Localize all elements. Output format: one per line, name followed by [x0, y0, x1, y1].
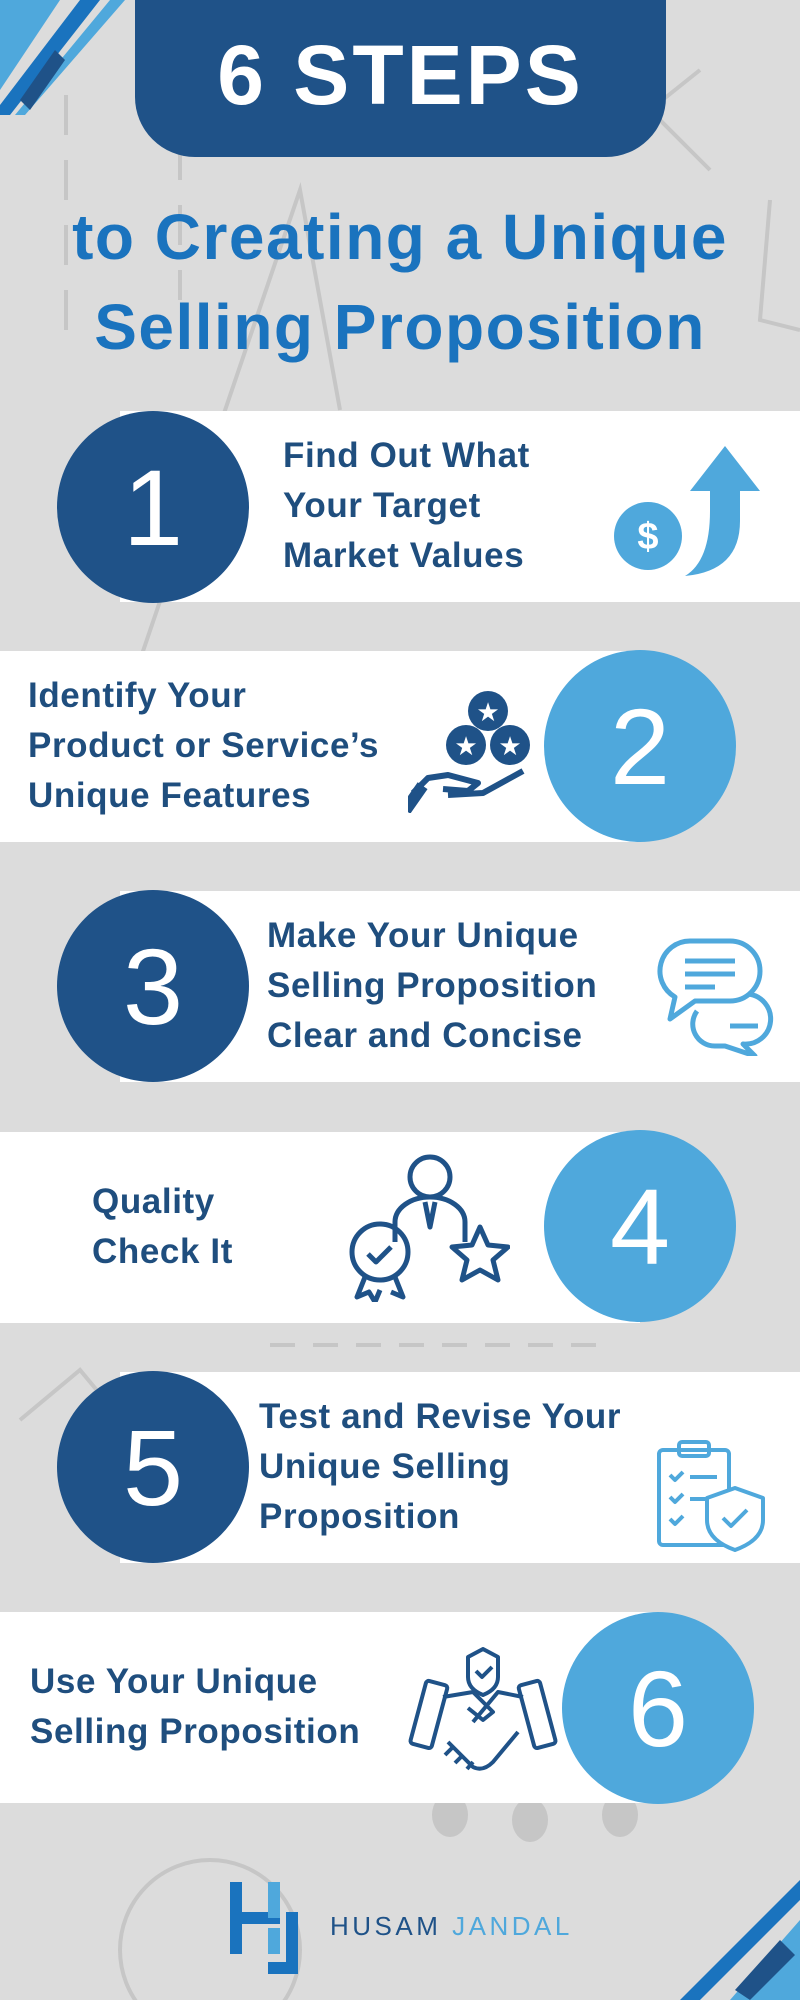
corner stripes top-left: [0, 0, 125, 115]
text 2: Identify Your: [28, 676, 246, 715]
circle 4: [544, 1130, 736, 1322]
text 1: [283, 436, 530, 575]
step 1: [57, 411, 800, 603]
subtitle: Selling Proposition: [94, 291, 706, 363]
text 1: Your Target: [283, 486, 481, 525]
subtitle: to Creating a Unique: [72, 201, 728, 273]
icon: quality badge person: [350, 1154, 510, 1302]
circle 5: 5: [123, 1406, 183, 1528]
text 2: [28, 676, 379, 815]
icon: money growth: $: [637, 516, 659, 558]
icon: handshake: [408, 1647, 558, 1771]
text 5: [259, 1397, 621, 1536]
icon: hand with stars: ★: [498, 732, 522, 762]
icon: chat bubbles: [657, 938, 774, 1056]
text 3: [267, 916, 597, 1055]
text 4: [92, 1182, 233, 1271]
circle 3: 3: [123, 926, 183, 1046]
step 4: [0, 1130, 736, 1323]
circle 4: 4: [610, 1166, 670, 1286]
circle 2: [544, 650, 736, 842]
text 2: Unique Features: [28, 776, 311, 815]
text 5: Proposition: [259, 1497, 460, 1536]
step 2: [0, 650, 736, 842]
text 1: Market Values: [283, 536, 524, 575]
text 6: Use Your Unique: [30, 1662, 318, 1701]
text 6: Selling Proposition: [30, 1712, 360, 1751]
text 3: Clear and Concise: [267, 1016, 583, 1055]
step 3: [57, 890, 800, 1082]
corner stripes bottom-right: [680, 1880, 800, 2000]
text 3: Selling Proposition: [267, 966, 597, 1005]
icon: hand with stars: ★: [454, 732, 478, 762]
text 1: Find Out What: [283, 436, 530, 475]
logo mark: [230, 1882, 298, 1974]
circle 3: [57, 890, 249, 1082]
circle 6: [562, 1612, 754, 1804]
circle 2: 2: [610, 686, 670, 806]
text 2: Product or Service’s: [28, 726, 379, 765]
subtitle: [72, 201, 728, 363]
circle 1: 1: [123, 446, 183, 568]
title box: 6 STEPS: [217, 28, 584, 122]
icon: clipboard shield: [657, 1440, 765, 1552]
step 5: [57, 1371, 800, 1563]
text 5: Unique Selling: [259, 1447, 510, 1486]
text 4: Check It: [92, 1232, 233, 1271]
icon: hand with stars: ★: [476, 698, 500, 728]
text 5: Test and Revise Your: [259, 1397, 621, 1436]
logo: [230, 1882, 573, 1974]
text 6: [30, 1662, 360, 1751]
text 3: Make Your Unique: [267, 916, 579, 955]
icon: money growth: [614, 446, 760, 576]
icon: hand with stars: [408, 691, 530, 813]
text 4: Quality: [92, 1182, 215, 1221]
circle 1: [57, 411, 249, 603]
logo text: HUSAM JANDAL: [330, 1911, 573, 1941]
title box: [135, 0, 666, 157]
circle 5: [57, 1371, 249, 1563]
circle 6: 6: [628, 1648, 688, 1768]
step 6: [0, 1612, 754, 1804]
